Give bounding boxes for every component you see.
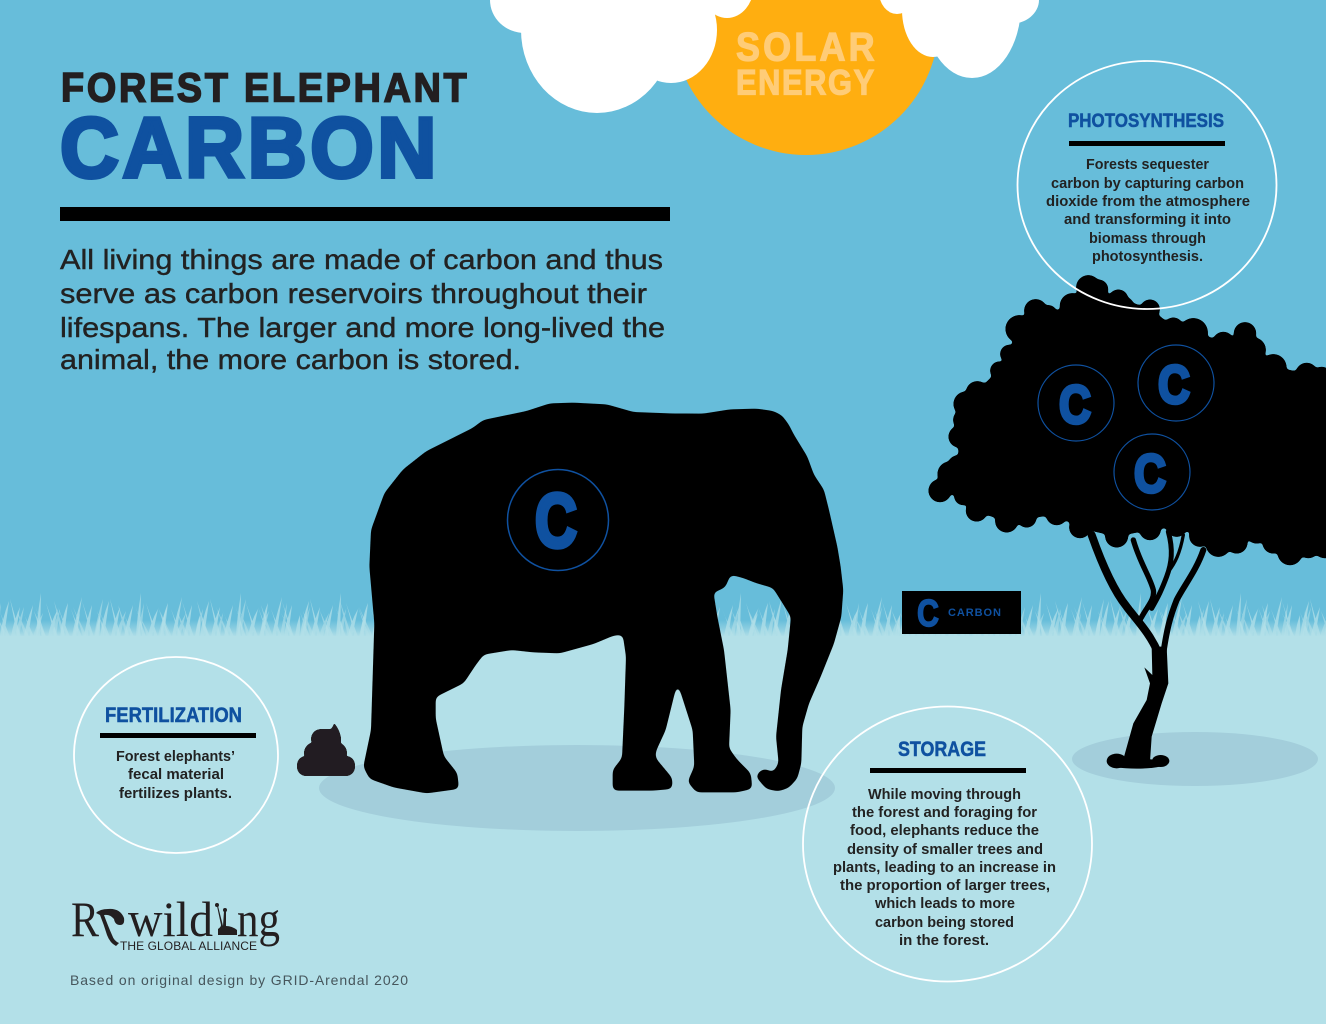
ground [0,636,1326,1024]
intro paragraph: All living things are made of carbon and thus [60,244,663,275]
solar energy label: ENERGY [736,63,874,102]
fertilization text: fecal material [128,767,224,783]
title rule [60,207,670,221]
panel: photosynthesis [1018,61,1276,309]
title line 1: FOREST ELEPHANT [61,65,467,111]
icon: dung pile [297,723,355,776]
cloud: left [490,0,754,113]
storage text [833,787,1056,949]
credit line: Based on original design by GRID-Arendal 2020 [70,972,408,988]
elephant carbon badge: C [535,479,577,564]
storage text: the proportion of larger trees, [840,878,1050,894]
photosynthesis text: biomass through [1089,231,1206,247]
panel: storage [803,706,1092,982]
logo: Rewilding: ng [237,891,280,947]
tree silhouette [928,275,1326,769]
carbon legend [902,591,1021,635]
fertilization text: Forest elephants’ [116,749,235,765]
storage text: plants, leading to an increase in [833,860,1056,876]
tree carbon badge 2: C [1158,355,1190,415]
logo: Rewilding: wild [128,891,213,947]
panel: fertilization [74,657,278,853]
logo i figure [215,903,237,935]
solar energy label [736,26,875,102]
logo tagline: THE GLOBAL ALLIANCE [120,939,257,953]
legend label: CARBON [948,607,1001,619]
tree foliage [928,275,1326,565]
elephant ground shadow [319,745,835,831]
photosynthesis text: photosynthesis. [1092,249,1203,265]
sky background [0,0,1326,640]
intro paragraph: serve as carbon reservoirs throughout their [60,278,647,309]
sun [673,0,939,155]
cloud: right [879,0,1039,78]
logo: Rewilding [71,891,280,953]
storage text: which leads to more [874,896,1015,912]
storage text: density of smaller trees and [847,842,1043,858]
storage text: carbon being stored [875,915,1014,931]
storage text: food, elephants reduce the [850,823,1039,839]
storage text: the forest and foraging for [852,805,1037,821]
logo: Rewilding: R [71,891,100,947]
elephant carbon badge [508,470,608,570]
tree ground shadow [1072,732,1318,786]
tree carbon badge 1 [1038,365,1114,441]
tree carbon badge 3: C [1134,444,1166,504]
tree carbon badge 2 [1138,345,1214,421]
storage heading: STORAGE [898,738,986,761]
elephant silhouette [364,403,843,793]
intro paragraph: lifespans. The larger and more long-lived the [60,312,665,343]
fertilization heading: FERTILIZATION [105,704,242,727]
tree carbon badge 3 [1114,434,1190,510]
storage text: While moving through [868,787,1021,803]
title [60,65,467,195]
photosynthesis heading: PHOTOSYNTHESIS [1068,111,1224,132]
tree trunk and branches [1092,532,1203,769]
photosynthesis text: carbon by capturing carbon [1051,176,1244,192]
photosynthesis text: Forests sequester [1086,157,1209,173]
logo e swirl [96,909,124,946]
intro paragraph [60,244,665,375]
fertilization text [116,749,235,802]
intro paragraph: animal, the more carbon is stored. [60,344,521,375]
photosynthesis text: and transforming it into [1064,212,1231,228]
legend C symbol: C [917,593,939,635]
storage text: in the forest. [899,933,989,949]
photosynthesis text: dioxide from the atmosphere [1046,194,1250,210]
solar energy label: SOLAR [736,26,875,70]
title line 2: CARBON [60,100,436,195]
fertilization text: fertilizes plants. [119,786,232,802]
grass strip [0,587,1326,637]
photosynthesis text [1046,157,1250,265]
tree carbon badge 1: C [1059,375,1091,435]
